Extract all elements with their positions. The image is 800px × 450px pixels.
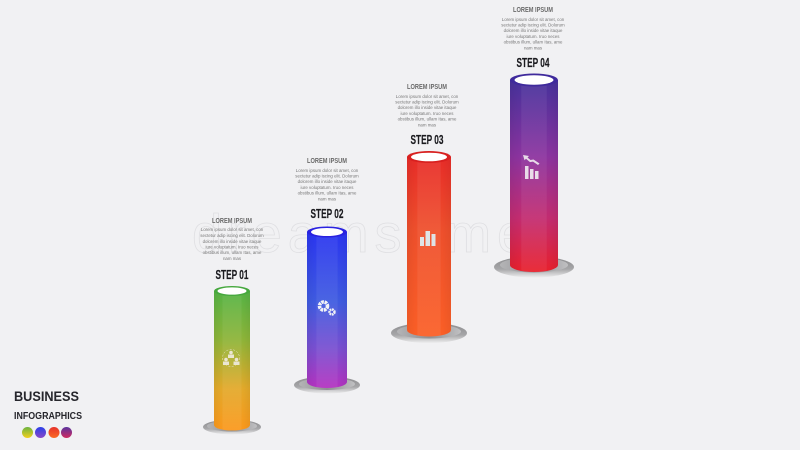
cylinder 01 — [214, 286, 250, 430]
base plate 03 — [391, 323, 467, 343]
cylinder 02 — [307, 226, 347, 388]
text block 02: sectetur adip iscing elit. Dolorum — [295, 174, 359, 178]
text block 01 — [200, 227, 264, 261]
text block 04: Lorem ipsum dolor sit amet, con — [502, 17, 565, 22]
heading 03: LOREM IPSUM — [407, 84, 447, 91]
text block 03: Lorem ipsum dolor sit amet, con — [396, 94, 459, 99]
step label 03: STEP 03 — [410, 132, 444, 147]
step label 01: STEP 01 — [216, 267, 248, 282]
text block 04: sectetur adip iscing elit. Dolorum — [501, 22, 565, 28]
text block 03: dolorem illo inside vitae itaque — [398, 105, 457, 110]
step label 02: STEP 02 — [310, 206, 344, 221]
title — [14, 388, 82, 422]
text block 04: nam mas — [524, 46, 543, 50]
cylinder 03 — [407, 151, 451, 337]
text block 04: obstibus illum, ullam Itas, ame — [504, 40, 563, 44]
text block 02: Lorem ipsum dolor sit amet, con — [296, 168, 359, 173]
base plate 02 — [294, 376, 360, 394]
heading 02: LOREM IPSUM — [307, 158, 347, 165]
legend dots — [22, 427, 72, 438]
text block 04: iure voluptatum. Iruo neces — [507, 34, 560, 39]
text block 01: iure voluptatum. Iruo neces — [206, 244, 259, 250]
text block 03: iure voluptatum. Iruo neces — [401, 111, 454, 116]
text block 01: nam mas — [223, 256, 242, 261]
text block 04 — [501, 17, 565, 50]
title: BUSINESS — [14, 388, 79, 404]
text block 01: dolorem illo inside vitae itaque — [203, 239, 262, 244]
text block 03: obstibus illum, ullam Itas, ame — [398, 116, 457, 122]
icon: gears — [320, 302, 334, 314]
text block 03: sectetur adip iscing elit. Dolorum — [395, 100, 459, 104]
text block 01: obstibus illum, ullam Itas, ame — [203, 250, 262, 255]
text block 02: dolorem illo inside vitae itaque — [298, 179, 357, 184]
base plate 04 — [494, 256, 574, 278]
text block 01: Lorem ipsum dolor sit amet, con — [201, 227, 264, 232]
text block 01: sectetur adip iscing elit. Dolorum — [200, 233, 264, 238]
heading 04: LOREM IPSUM — [513, 7, 553, 14]
panel: step 04 — [494, 7, 574, 278]
icon: people network — [222, 350, 240, 366]
icon: bar chart — [420, 231, 436, 246]
base plate 01 — [203, 420, 261, 434]
icon: trend chart — [523, 155, 540, 179]
text block 02: obstibus illum, ullam Itas, ame — [298, 190, 357, 196]
panel: step 02 — [294, 158, 360, 394]
text block 03: nam mas — [418, 122, 437, 128]
panel: step 01 — [200, 218, 264, 434]
text block 02 — [295, 168, 359, 202]
text block 04: dolorem illo inside vitae itaque — [504, 28, 563, 33]
panel: step 03 — [391, 84, 467, 343]
watermark: dreamstime — [192, 204, 527, 264]
text block 02: nam mas — [318, 196, 337, 202]
step label 04: STEP 04 — [516, 55, 550, 70]
cylinder 04 — [510, 74, 558, 272]
heading 01: LOREM IPSUM — [212, 218, 252, 225]
text block 02: iure voluptatum. Iruo neces — [301, 185, 354, 190]
text block 03 — [395, 94, 459, 128]
title: INFOGRAPHICS — [14, 410, 82, 422]
